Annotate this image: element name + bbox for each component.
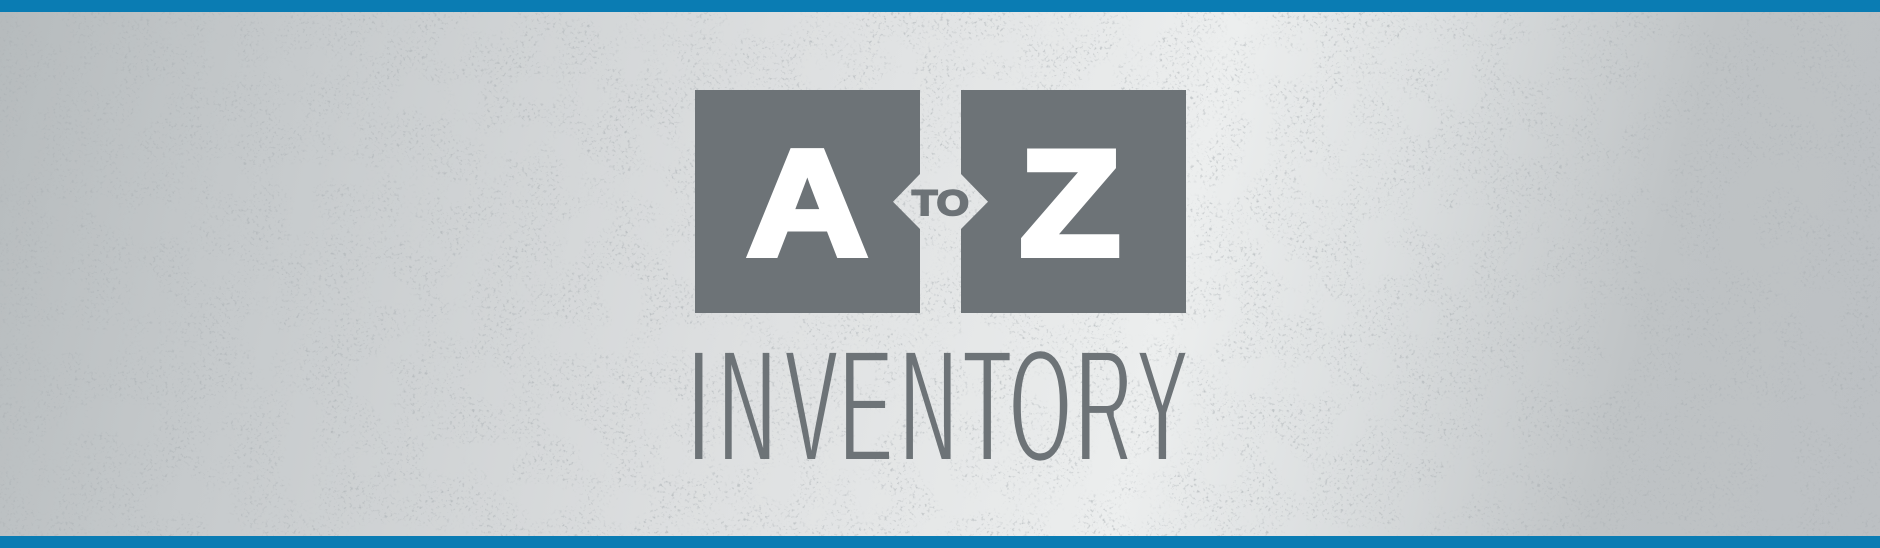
logo: A to Z xyxy=(695,90,1186,313)
letter A: A xyxy=(746,118,868,287)
panel: left square with notch xyxy=(695,90,920,313)
panel: right square with notch xyxy=(961,90,1186,313)
bottom blue bar xyxy=(0,536,1880,548)
letter Z: Z xyxy=(1020,120,1120,287)
top blue bar xyxy=(0,0,1880,12)
title: INVENTORY: INVENTORY xyxy=(688,315,1189,496)
connector word: TO: TO xyxy=(912,184,969,223)
